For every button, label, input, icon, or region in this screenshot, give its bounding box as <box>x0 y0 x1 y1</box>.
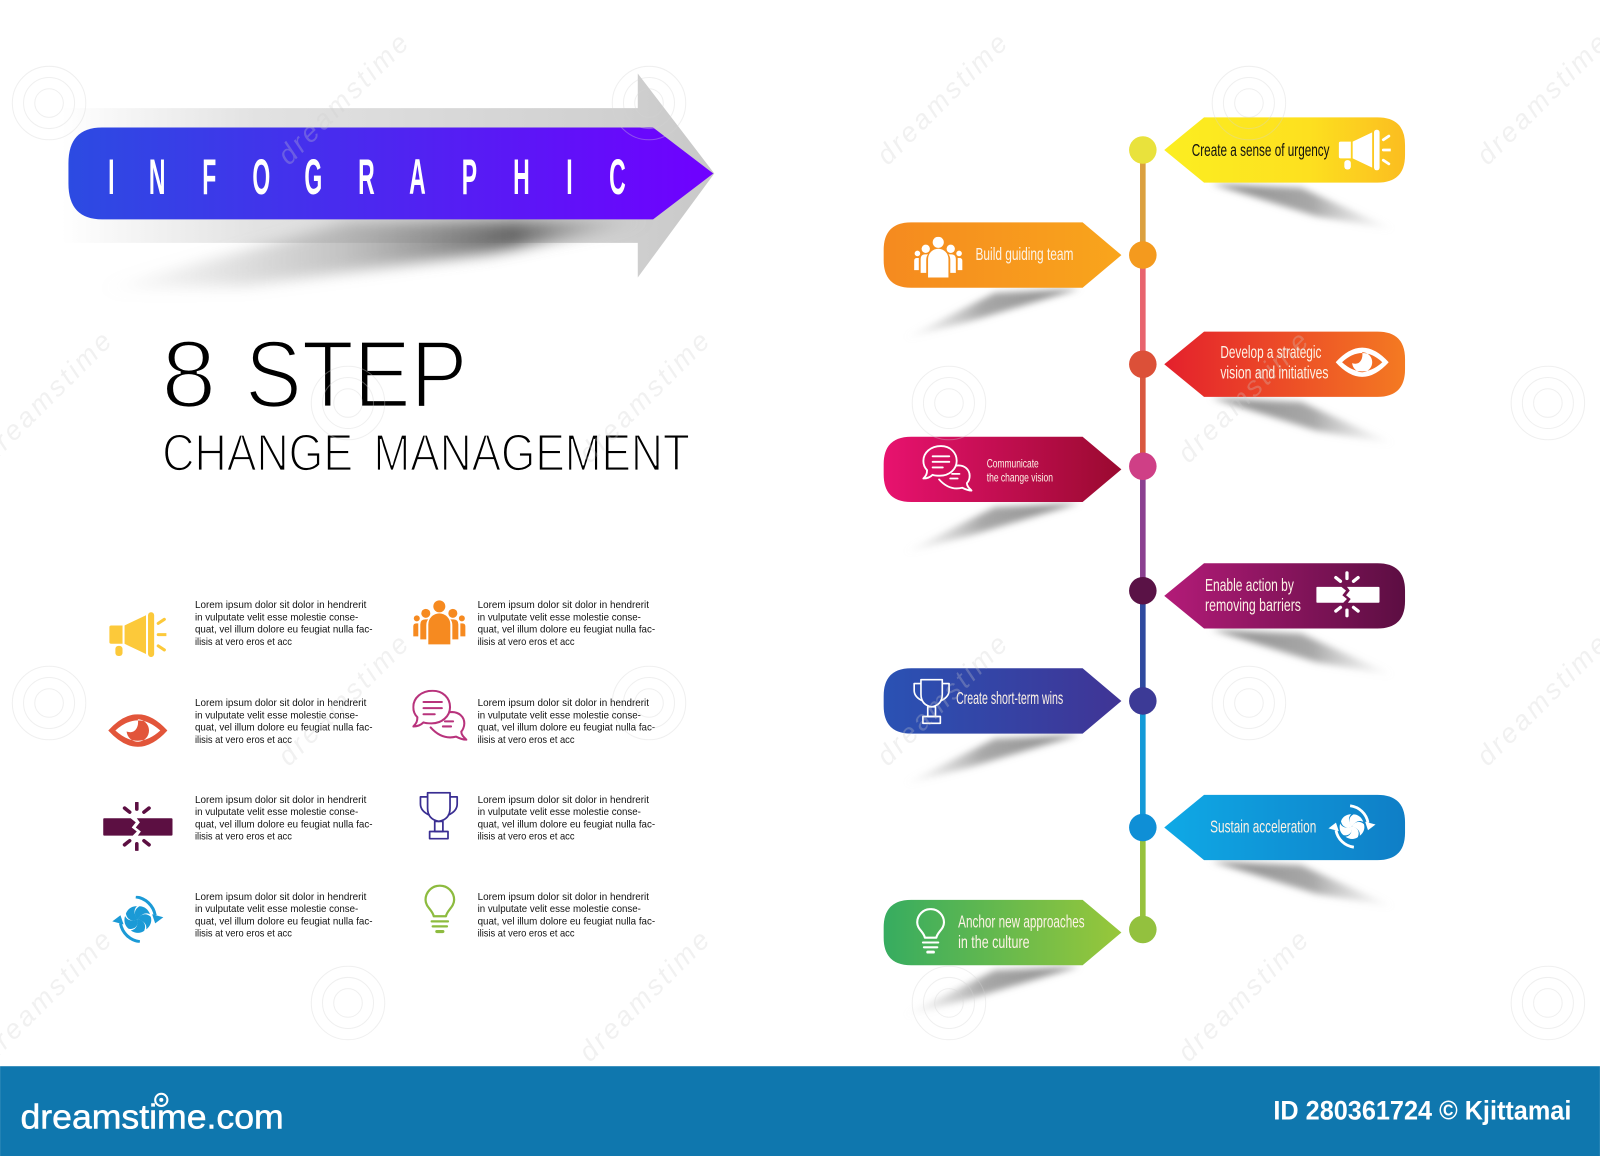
watermark: dreamstime <box>870 27 1013 171</box>
title line: CHANGE MANAGEMENT: CHANGE <box>162 424 353 482</box>
legend item: urgency <box>109 600 372 657</box>
title line: CHANGE MANAGEMENT: MANAGEMENT <box>374 424 690 482</box>
watermark: dreamstime <box>1171 924 1314 1067</box>
legend text <box>478 600 655 648</box>
watermark: dreamstime <box>271 628 414 772</box>
title line: 8 STEP <box>161 321 467 428</box>
legend text: quat, vel illum dolore eu feugiat nulla fac- <box>478 625 655 636</box>
label: Develop a strategic <box>1220 342 1322 362</box>
label: removing barriers <box>1205 595 1301 615</box>
banner arrow: INFOGRAPHIC <box>61 73 714 290</box>
icon: broken bar <box>103 803 173 850</box>
icon: eye <box>108 714 167 747</box>
banner shape <box>68 128 713 219</box>
banner text: I <box>108 150 114 205</box>
legend text: quat, vel illum dolore eu feugiat nulla fac- <box>195 819 372 830</box>
icon: broken bar <box>1316 573 1380 616</box>
legend item: wins <box>420 793 655 843</box>
label <box>1220 342 1329 383</box>
step 3: develop a strategic vision <box>1164 332 1405 444</box>
legend text: ilisis at vero eros et acc <box>478 637 575 648</box>
legend list <box>103 600 655 942</box>
legend text: ilisis at vero eros et acc <box>478 929 575 940</box>
banner text: H <box>513 150 530 205</box>
legend text: in vulputate velit esse molestie conse- <box>195 807 358 818</box>
legend text: in vulputate velit esse molestie conse- <box>195 710 358 721</box>
banner text: P <box>462 150 477 205</box>
title line: CHANGE MANAGEMENT <box>162 424 690 482</box>
step 4: communicate the change vision <box>884 437 1121 553</box>
legend item: culture <box>426 886 655 940</box>
icon: megaphone <box>109 612 166 657</box>
legend text: Lorem ipsum dolor sit dolor in hendrerit <box>195 600 367 611</box>
footer bar <box>0 1066 1600 1156</box>
banner text <box>108 150 626 205</box>
legend text: ilisis at vero eros et acc <box>195 929 292 940</box>
footer logo: dreamstime.com <box>20 1098 284 1136</box>
legend text: Lorem ipsum dolor sit dolor in hendrerit <box>478 600 649 611</box>
legend text: ilisis at vero eros et acc <box>195 735 292 746</box>
icon: chat <box>923 446 972 491</box>
label <box>958 911 1085 952</box>
legend text: quat, vel illum dolore eu feugiat nulla fac- <box>478 723 655 734</box>
label: Build guiding team <box>975 244 1073 264</box>
legend text <box>195 892 372 940</box>
legend item: communicate <box>413 691 655 746</box>
step 5: enable action by removing barriers <box>1164 563 1405 675</box>
title line: 8 STEP: 8 <box>161 321 216 428</box>
icon: trophy <box>420 793 457 839</box>
legend text <box>478 698 655 746</box>
label <box>987 456 1053 485</box>
icon: bulb <box>917 909 944 952</box>
step 2: build guiding team <box>884 222 1121 339</box>
title <box>161 321 690 482</box>
legend text: in vulputate velit esse molestie conse- <box>478 612 641 623</box>
label: Create short-term wins <box>956 688 1063 708</box>
banner shadow <box>97 220 653 290</box>
legend text <box>195 600 372 648</box>
banner text: G <box>304 150 322 205</box>
legend text: quat, vel illum dolore eu feugiat nulla fac- <box>478 819 655 830</box>
icon: people <box>413 600 465 644</box>
legend text: in vulputate velit esse molestie conse- <box>195 904 358 915</box>
banner text: N <box>149 150 166 205</box>
banner text: O <box>252 150 270 205</box>
title line: 8 STEP: STEP <box>245 321 467 428</box>
legend item: barriers <box>103 795 372 850</box>
icon: chat <box>413 691 466 740</box>
label: Create a sense of urgency <box>1192 140 1330 160</box>
label: Anchor new approaches <box>958 911 1085 931</box>
watermark: dreamstime <box>870 628 1013 772</box>
legend text: in vulputate velit esse molestie conse- <box>478 807 641 818</box>
banner text: C <box>609 150 626 205</box>
label: Communicate <box>987 456 1039 470</box>
legend text: Lorem ipsum dolor sit dolor in hendrerit <box>195 795 367 806</box>
grey arrow behind banner <box>61 73 714 278</box>
banner text: R <box>358 150 375 205</box>
watermark: dreamstime <box>1171 325 1314 468</box>
legend text <box>195 795 372 843</box>
legend text: quat, vel illum dolore eu feugiat nulla fac- <box>195 723 372 734</box>
icon: fan <box>112 897 163 942</box>
legend text: in vulputate velit esse molestie conse- <box>195 612 358 623</box>
timeline spine <box>1129 136 1157 943</box>
legend text: ilisis at vero eros et acc <box>195 637 292 648</box>
legend text <box>478 892 655 940</box>
legend text: Lorem ipsum dolor sit dolor in hendrerit <box>478 892 649 903</box>
legend text <box>195 698 372 746</box>
legend text: Lorem ipsum dolor sit dolor in hendrerit <box>478 698 649 709</box>
watermark: dreamstime <box>271 27 414 171</box>
icon: trophy <box>914 680 949 723</box>
watermark: dreamstime <box>572 325 715 468</box>
watermark: dreamstime <box>572 924 715 1067</box>
legend item: team <box>413 600 655 648</box>
legend text: quat, vel illum dolore eu feugiat nulla fac- <box>195 916 372 927</box>
legend text: ilisis at vero eros et acc <box>478 832 575 843</box>
icon: eye <box>1336 348 1389 377</box>
icon: megaphone <box>1339 130 1391 170</box>
icon: fan <box>1328 806 1376 847</box>
banner text: I <box>566 150 573 205</box>
step 1: create a sense of urgency <box>1164 117 1405 230</box>
legend text: in vulputate velit esse molestie conse- <box>478 710 641 721</box>
step 8: anchor new approaches <box>884 900 1121 1016</box>
icon: bulb <box>426 886 454 932</box>
label: the change vision <box>987 471 1053 485</box>
legend text: Lorem ipsum dolor sit dolor in hendrerit <box>195 892 367 903</box>
legend text: in vulputate velit esse molestie conse- <box>478 904 641 915</box>
step 6: create short-term wins <box>884 668 1121 785</box>
legend text: quat, vel illum dolore eu feugiat nulla fac- <box>195 625 372 636</box>
legend item: acceleration <box>112 892 372 942</box>
banner text: A <box>409 150 426 205</box>
legend item: vision <box>108 698 372 747</box>
legend text: quat, vel illum dolore eu feugiat nulla fac- <box>478 916 655 927</box>
icon: people <box>914 237 962 277</box>
legend text: Lorem ipsum dolor sit dolor in hendrerit <box>478 795 649 806</box>
label: Enable action by <box>1205 575 1294 595</box>
legend text: Lorem ipsum dolor sit dolor in hendrerit <box>195 698 367 709</box>
label: Sustain acceleration <box>1210 817 1316 837</box>
banner text: F <box>202 150 216 205</box>
label: in the culture <box>958 932 1030 952</box>
label <box>1205 575 1301 615</box>
legend text <box>478 795 655 843</box>
footer credit: ID 280361724 © Kjittamai <box>1273 1095 1571 1125</box>
legend text: ilisis at vero eros et acc <box>195 832 292 843</box>
legend text: ilisis at vero eros et acc <box>478 735 575 746</box>
label: vision and initiatives <box>1220 363 1329 383</box>
step 7: sustain acceleration <box>1164 795 1405 907</box>
